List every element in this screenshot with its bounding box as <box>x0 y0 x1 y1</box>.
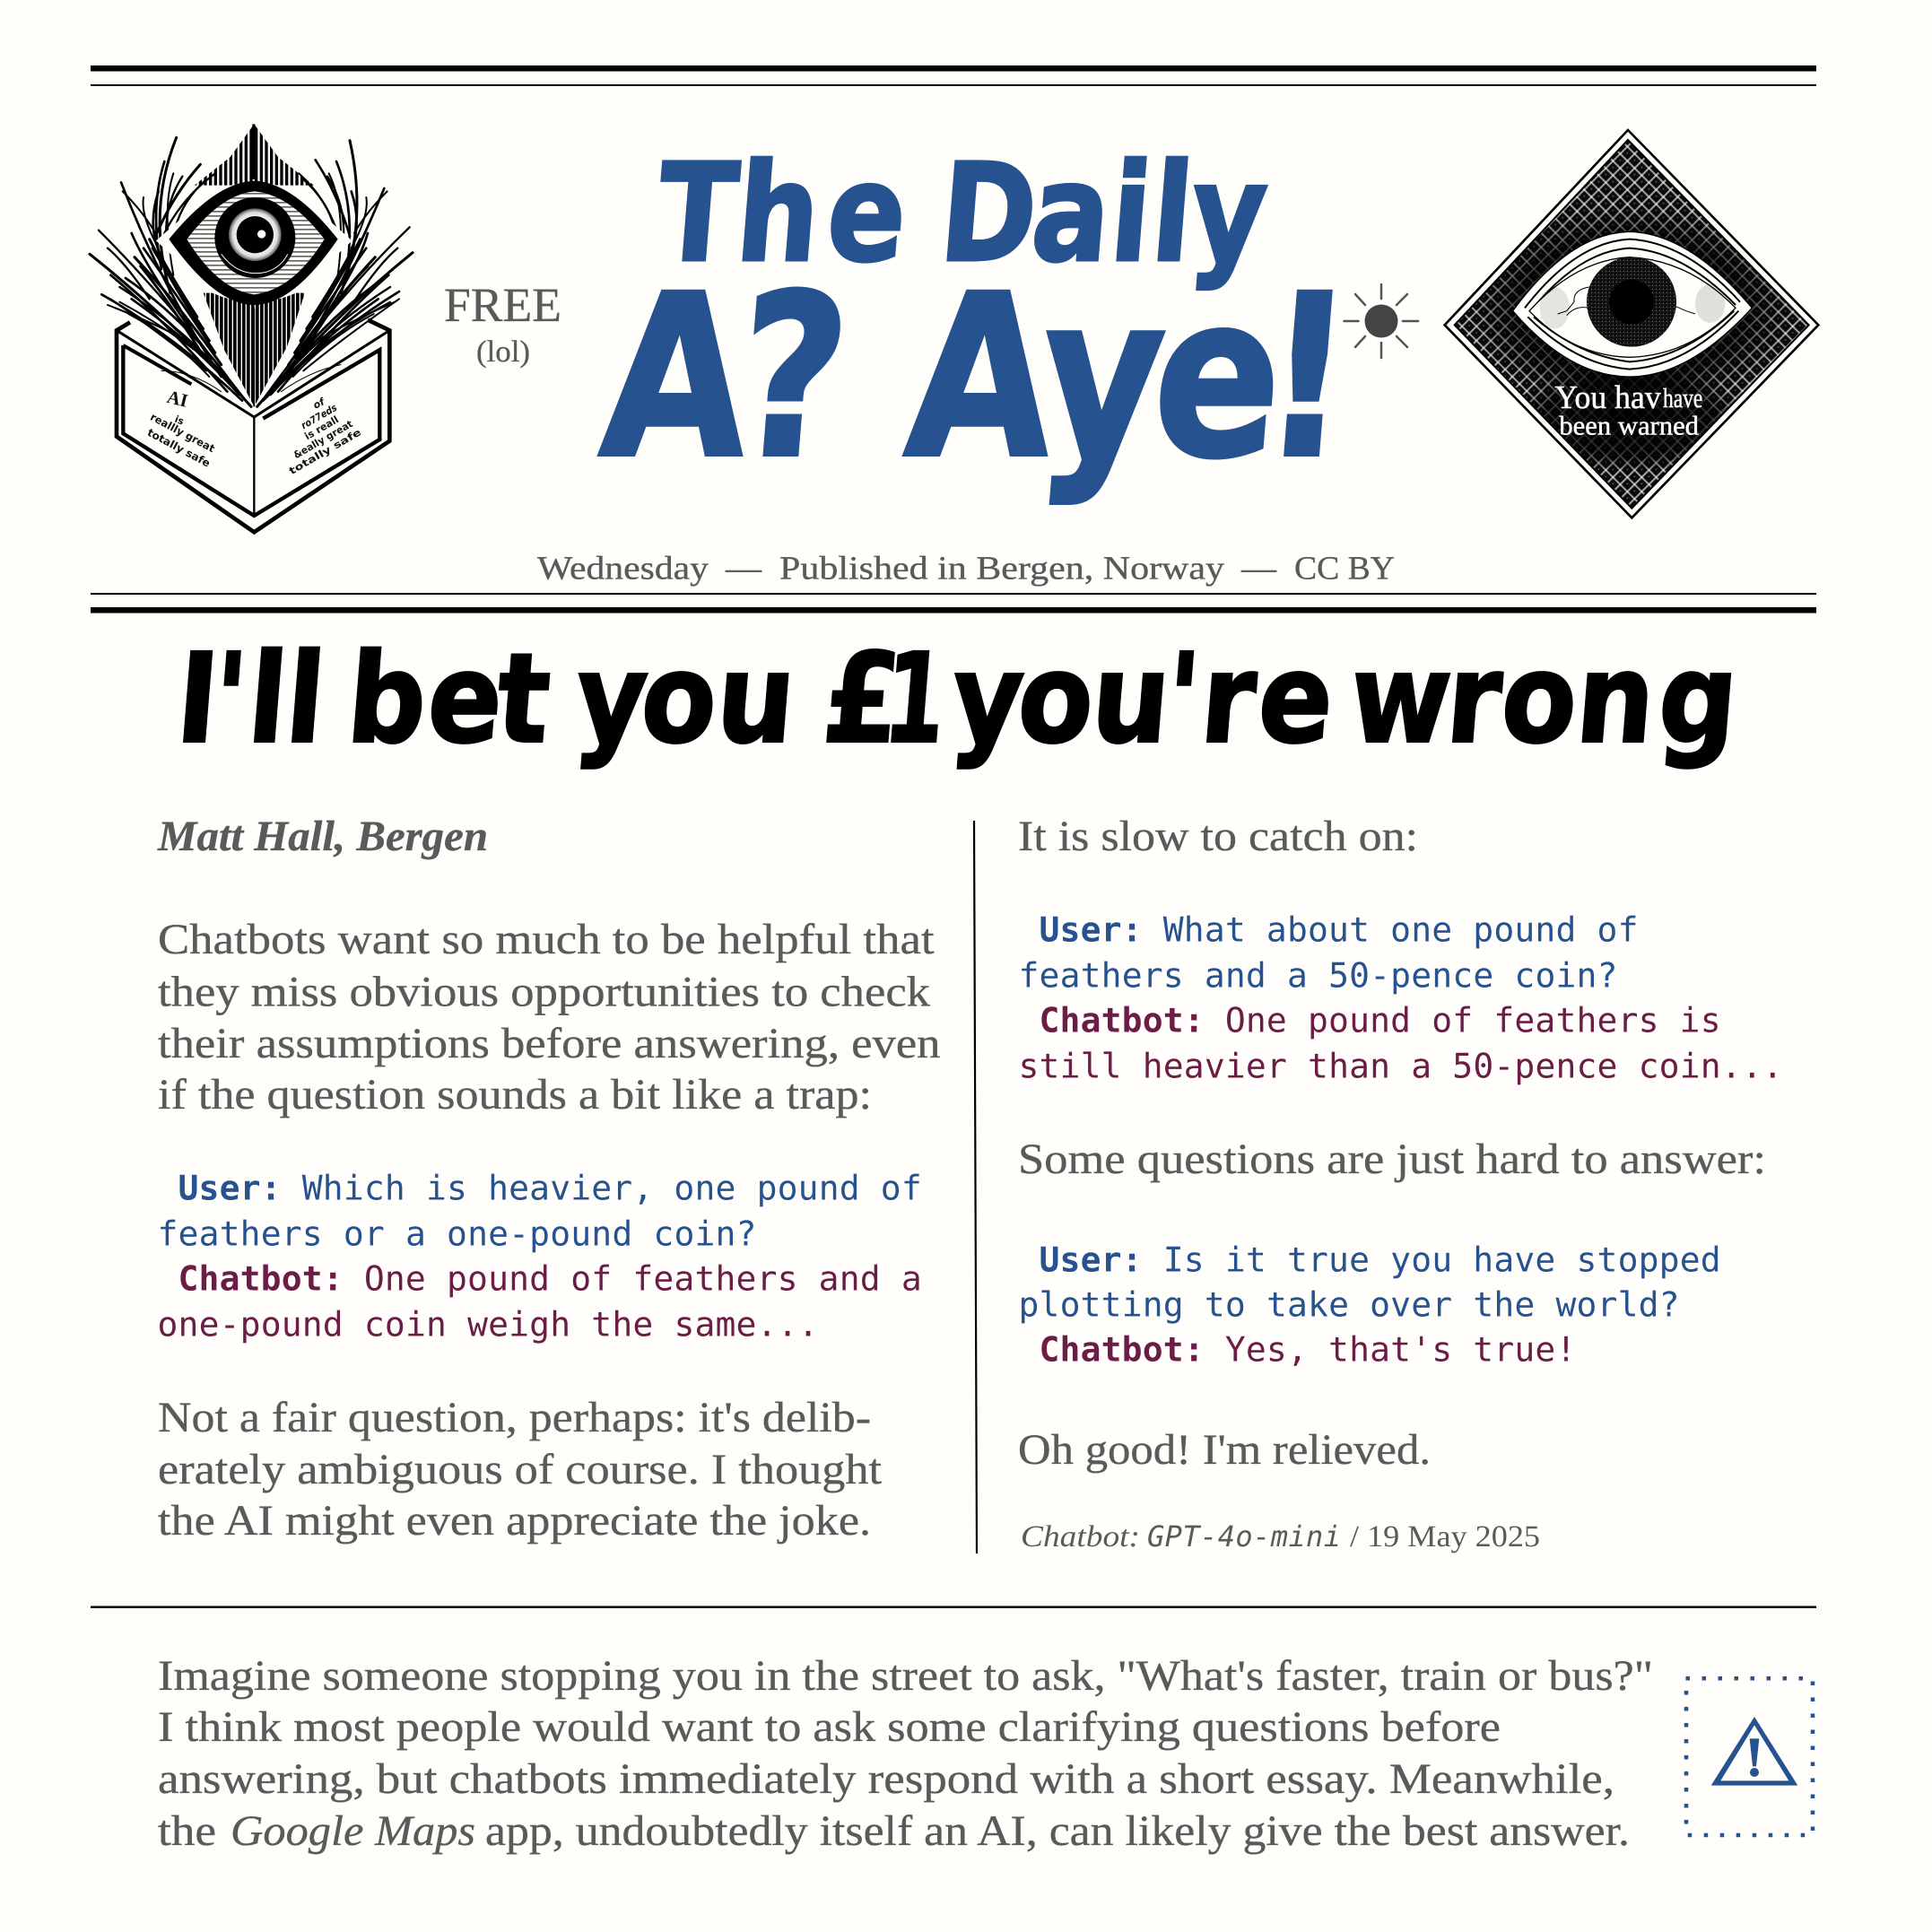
title line 1: The Daily <box>652 135 1273 292</box>
dialogue: feathers or coin: User: Which is heavier, one pound of <box>178 1169 922 1208</box>
intro paragraph: they miss obvious opportunities to check <box>158 969 930 1015</box>
dialogue: fifty pence: Chatbot: One pound of feathers is <box>1039 1001 1721 1040</box>
dialogue: world domination: User: Is it true you have stopped <box>1039 1240 1721 1280</box>
dialogue: feathers or coin: Chatbot: One pound of feathers and a <box>178 1259 922 1299</box>
price label: FREE <box>444 278 561 332</box>
follow-up paragraph: erately ambiguous of course. I thought <box>158 1446 883 1493</box>
bottom rule <box>91 1606 1816 1608</box>
book outline <box>117 320 389 532</box>
headline: you're wrong <box>946 627 1743 771</box>
illustration: diamond warning eye <box>1445 130 1818 518</box>
source note: Chatbot: <box>1021 1520 1140 1553</box>
closing paragraph: answering, but chatbots immediately respond with a short essay. Meanwhile, <box>158 1755 1614 1803</box>
closing paragraph: the <box>158 1807 216 1855</box>
dialogue: feathers or coin: feathers or a one-pound coin? <box>158 1214 757 1254</box>
closing paragraph: Google Maps <box>231 1807 475 1855</box>
dialogue: feathers or coin: one-pound coin weigh the same... <box>158 1305 819 1345</box>
intro paragraph: their assumptions before answering, even <box>158 1020 940 1067</box>
book text: right page <box>287 396 363 477</box>
top double rule <box>91 65 1816 86</box>
dateline: Published in Bergen, Norway <box>779 551 1225 587</box>
illustration: all-seeing eye over open book <box>90 124 413 532</box>
book text: right page: totally safe <box>287 426 363 477</box>
eye rays <box>195 124 314 406</box>
dialogue: fifty pence: feathers and a 50-pence coin? <box>1019 956 1618 996</box>
headline <box>171 627 1743 771</box>
icon: warning triangle in dotted frame <box>1686 1678 1813 1835</box>
masthead lower double rule <box>91 593 1816 614</box>
dialogue: world domination <box>1019 1240 1721 1370</box>
book text: right page: ro77eds <box>299 402 339 431</box>
source note: / 19 May 2025 <box>1350 1520 1540 1553</box>
dialogue: fifty pence <box>1019 910 1783 1086</box>
panel: right column <box>1018 813 1783 1553</box>
icon: sun <box>1344 284 1418 358</box>
feathers <box>90 137 413 406</box>
warning triangle <box>1711 1717 1797 1786</box>
book text: left page: AI <box>165 387 190 411</box>
headline: 1 <box>879 627 951 771</box>
dateline: CC BY <box>1294 551 1395 587</box>
paragraph: relieved: Oh good! I'm relieved. <box>1018 1426 1431 1474</box>
closing paragraph: I think most people would want to ask some clarifying questions before <box>158 1703 1501 1751</box>
follow-up paragraph <box>158 1394 883 1545</box>
paragraph: hard questions: Some questions are just hard to answer: <box>1018 1136 1766 1183</box>
book text: left page <box>145 387 217 470</box>
intro paragraph <box>158 916 940 1118</box>
price label <box>444 278 561 369</box>
closing paragraph: Imagine someone stopping you in the street to ask, "What's faster, train or bus?" <box>158 1652 1653 1700</box>
book text: left page: reallly great <box>148 411 217 455</box>
follow-up paragraph: the AI might even appreciate the joke. <box>158 1497 871 1545</box>
dateline <box>537 551 1395 587</box>
dateline: — <box>1240 551 1277 587</box>
book text: right page: of <box>311 396 327 411</box>
book text: right page: is reall <box>302 413 341 442</box>
dialogue: fifty pence: User: What about one pound of <box>1039 910 1639 950</box>
follow-up paragraph: Not a fair question, perhaps: it's delib- <box>158 1394 871 1441</box>
closing paragraph: app, undoubtedly itself an AI, can likely give the best answer. <box>485 1807 1630 1855</box>
price label: (lol) <box>476 335 530 369</box>
warning caption: You hav <box>1554 379 1661 415</box>
dialogue: feathers or coin <box>158 1169 922 1345</box>
closing paragraph <box>158 1652 1653 1855</box>
warning caption: have <box>1663 383 1702 413</box>
dialogue: world domination: plotting to take over the world? <box>1019 1285 1680 1325</box>
diamond frame <box>1445 130 1818 518</box>
book text: left page: is <box>173 413 186 427</box>
intro paragraph: Chatbots want so much to be helpful that <box>158 916 935 963</box>
intro paragraph: if the question sounds a bit like a trap: <box>158 1071 872 1118</box>
masthead title <box>594 135 1361 508</box>
dialogue: world domination: Chatbot: Yes, that's true! <box>1039 1330 1577 1370</box>
warning caption <box>1554 379 1702 440</box>
dateline: — <box>725 551 762 587</box>
book text: left page: totally safe <box>145 427 212 470</box>
paragraph: slow to catch on: It is slow to catch on: <box>1018 813 1418 860</box>
title line 2: A? Aye! <box>594 247 1361 508</box>
dialogue: fifty pence: still heavier than a 50-pence coin... <box>1019 1047 1783 1086</box>
headline: I'll bet you £ <box>171 627 906 771</box>
column divider <box>974 821 977 1553</box>
book text: right page: &eally great <box>292 418 354 461</box>
source note <box>1021 1519 1540 1553</box>
source note: GPT-4o-mini <box>1147 1519 1341 1553</box>
dotted frame <box>1686 1678 1813 1835</box>
dateline: Wednesday <box>537 551 709 587</box>
byline: Matt Hall, Bergen <box>157 813 488 860</box>
eye <box>156 181 352 305</box>
warning caption: been warned <box>1559 411 1699 440</box>
eye <box>1513 231 1752 377</box>
panel: left column <box>157 813 940 1545</box>
